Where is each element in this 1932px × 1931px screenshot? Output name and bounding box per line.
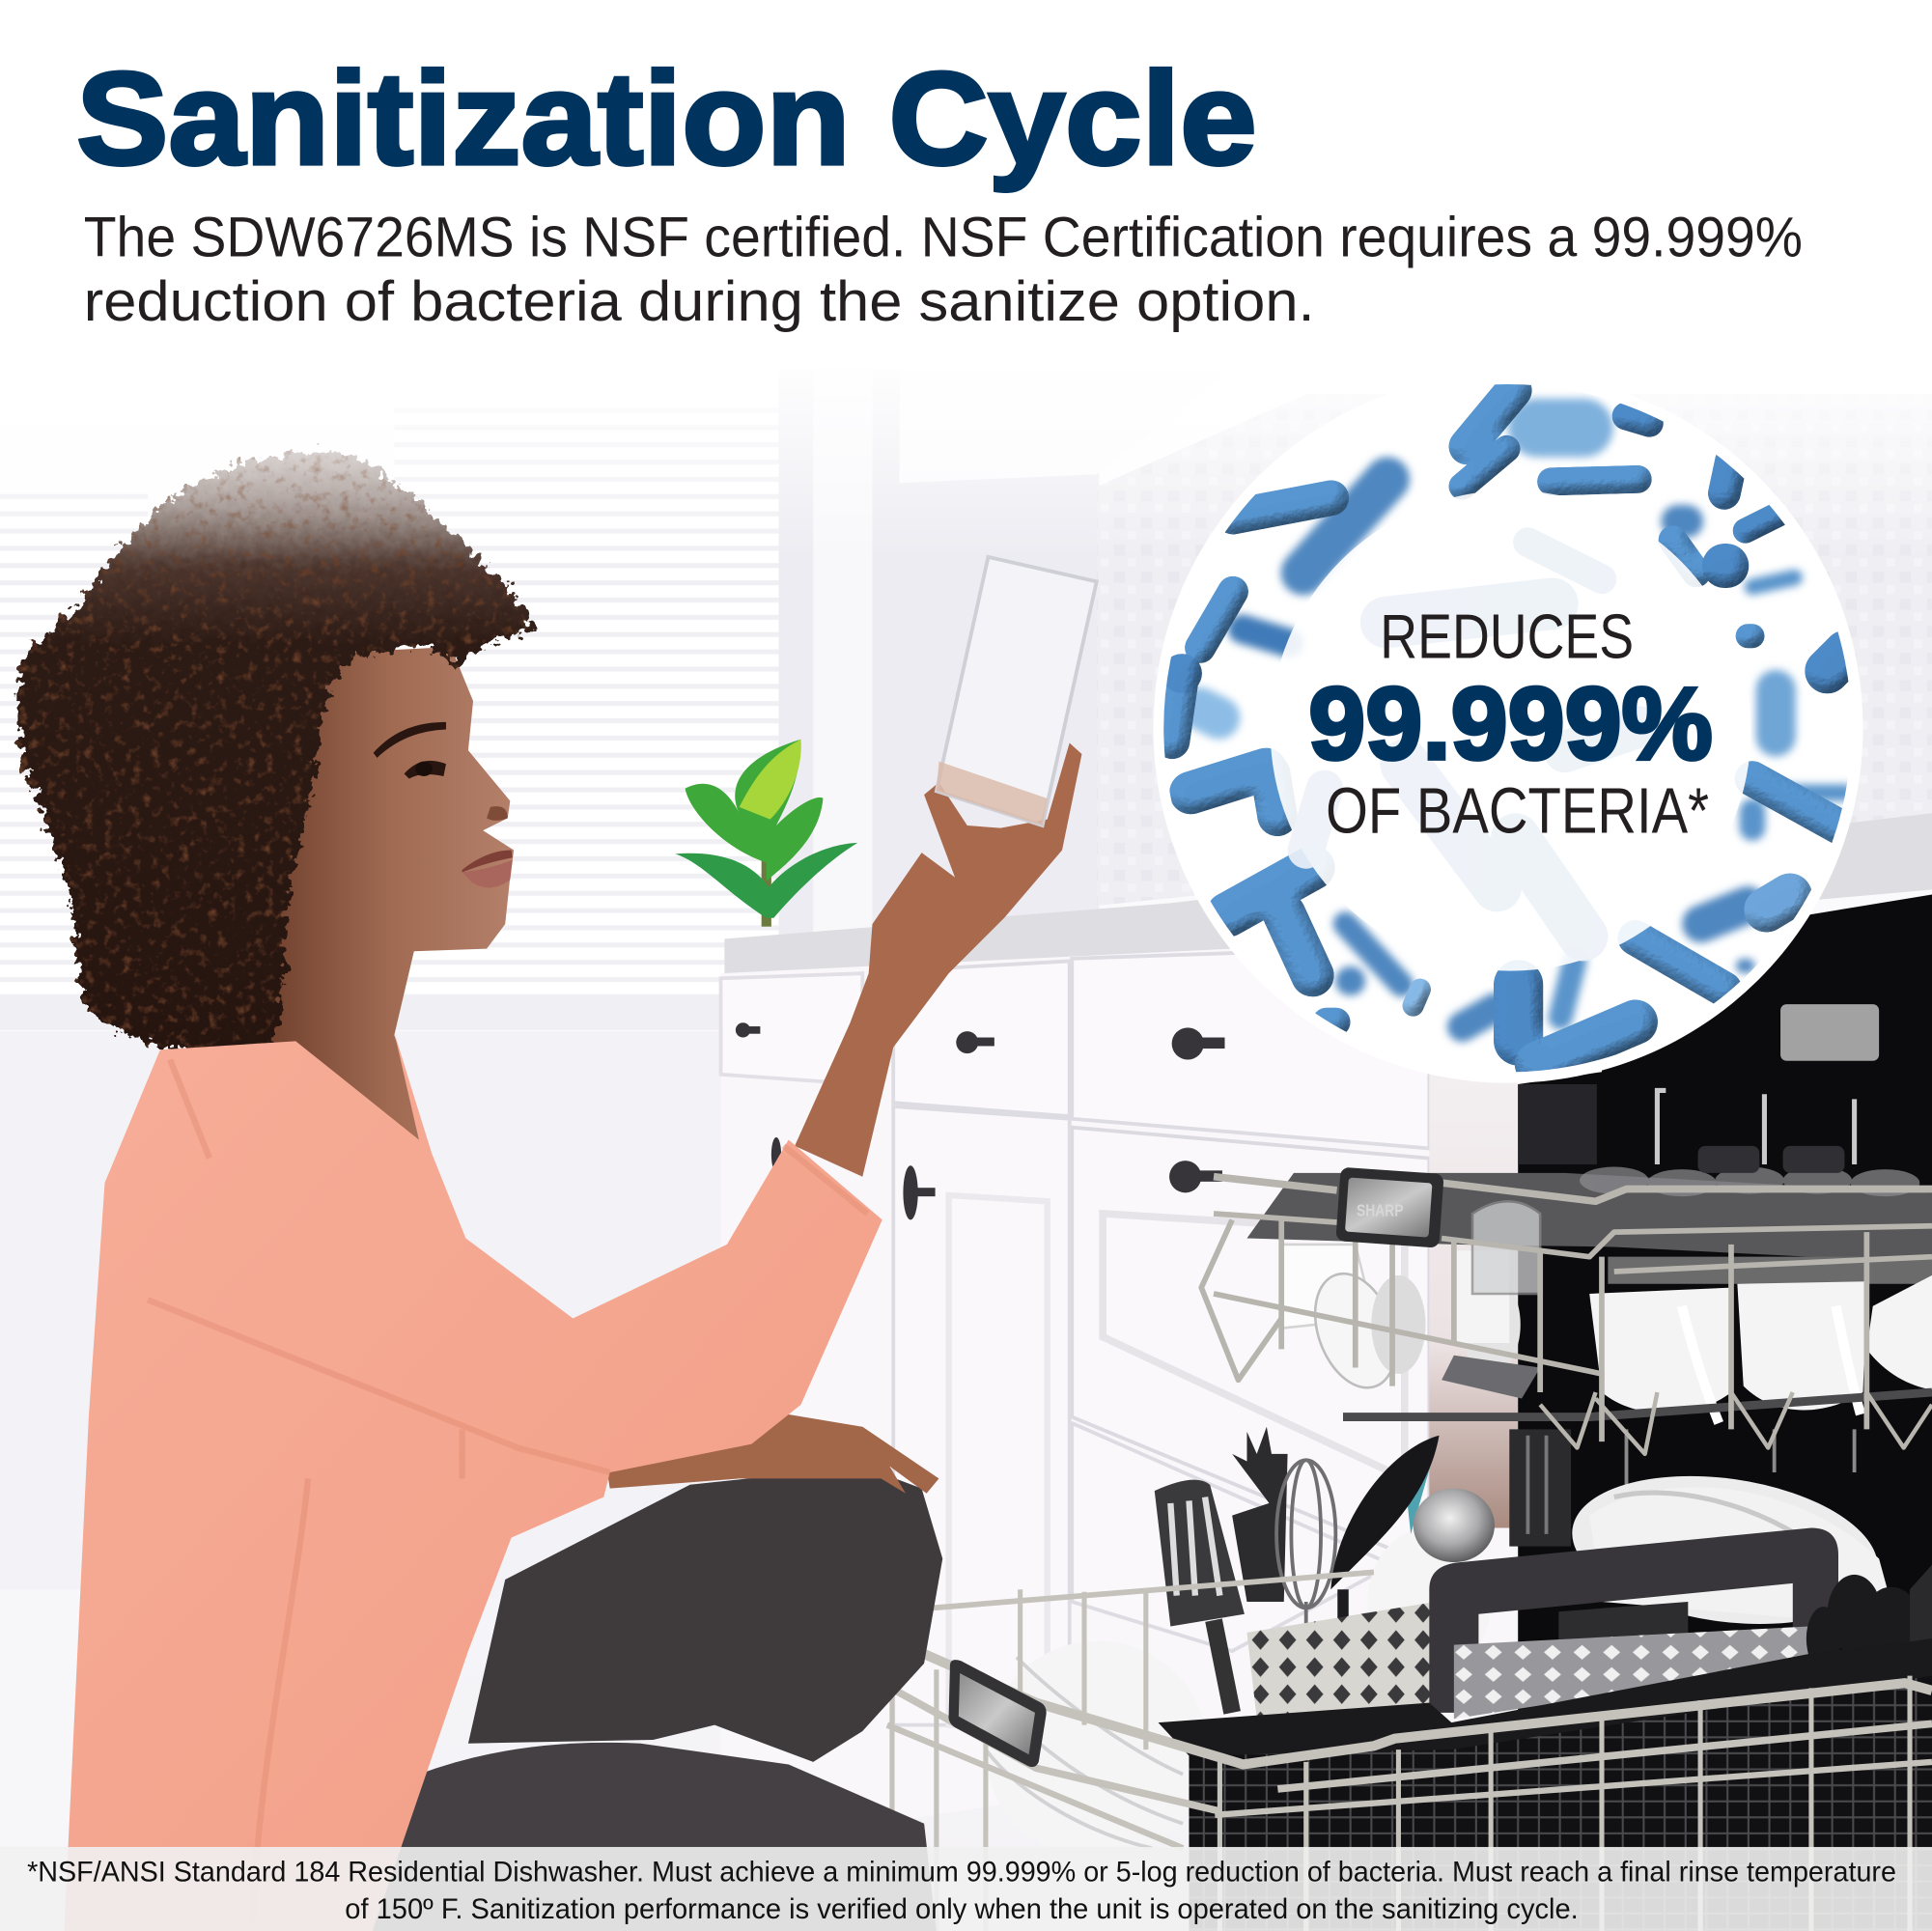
countertop	[724, 813, 1932, 973]
lower rack badge	[948, 1660, 1047, 1767]
translucent white centre	[1271, 490, 1750, 971]
title: Sanitization Cycle	[76, 44, 1257, 192]
reduces label: REDUCES	[1380, 601, 1634, 671]
lower rack dishes	[963, 1436, 1897, 1882]
rack wires	[1201, 1177, 1932, 1454]
subtitle	[84, 206, 1803, 333]
upper rack glasses	[1580, 1146, 1919, 1196]
neck and face	[265, 647, 514, 1170]
top white fade	[0, 351, 1932, 561]
dishes on upper rack	[1281, 1201, 1932, 1423]
blurred bacteria	[1200, 428, 1846, 1026]
footnote text: *NSF/ANSI Standard 184 Residential Dishwasher. Must achieve a minimum 99.999% or 5-log reduction of bacteria. Must reach a final rinse temperature	[27, 1857, 1896, 1889]
footnote text	[27, 1857, 1896, 1925]
shirt	[64, 1032, 882, 1931]
bacteria illustration	[1172, 390, 1846, 1064]
subtitle: The SDW6726MS is NSF certified. NSF Certification requires a 99.999%	[84, 206, 1803, 268]
badge ring	[1153, 374, 1863, 1083]
facial features	[374, 722, 513, 888]
upper rack	[1201, 1146, 1932, 1454]
SHARP rack badge: SHARP	[1357, 1201, 1404, 1220]
lower rack wires	[864, 1572, 1932, 1931]
footnote text: of 150º F. Sanitization performance is verified only when the unit is operated on the sanitizing cycle.	[345, 1893, 1579, 1925]
of bacteria label: OF BACTERIA*	[1326, 776, 1709, 848]
percentage figure: 99.999%	[1308, 665, 1713, 781]
bacteria circle badge	[1153, 374, 1863, 1083]
cutlery basket	[1159, 1638, 1932, 1931]
shirt folds	[148, 1059, 867, 1922]
subtitle: reduction of bacteria during the sanitize option.	[84, 270, 1315, 333]
SHARP rack badge	[1335, 1167, 1444, 1248]
plant	[675, 740, 857, 927]
utensils	[1155, 1427, 1932, 1719]
footnote band	[0, 1847, 1932, 1931]
faint centre bacteria	[1306, 543, 1638, 937]
cabinet knobs	[736, 1022, 1224, 1219]
near hand on knee	[603, 1414, 938, 1494]
dishwasher interior	[1509, 894, 1932, 1725]
glass	[937, 557, 1097, 826]
woman	[16, 450, 1097, 1931]
hair	[16, 450, 532, 1061]
raised forearm and hand	[795, 743, 1081, 1177]
trousers	[370, 1467, 942, 1931]
sharp bacteria	[1172, 390, 1846, 1064]
cabinets	[721, 937, 1518, 1848]
